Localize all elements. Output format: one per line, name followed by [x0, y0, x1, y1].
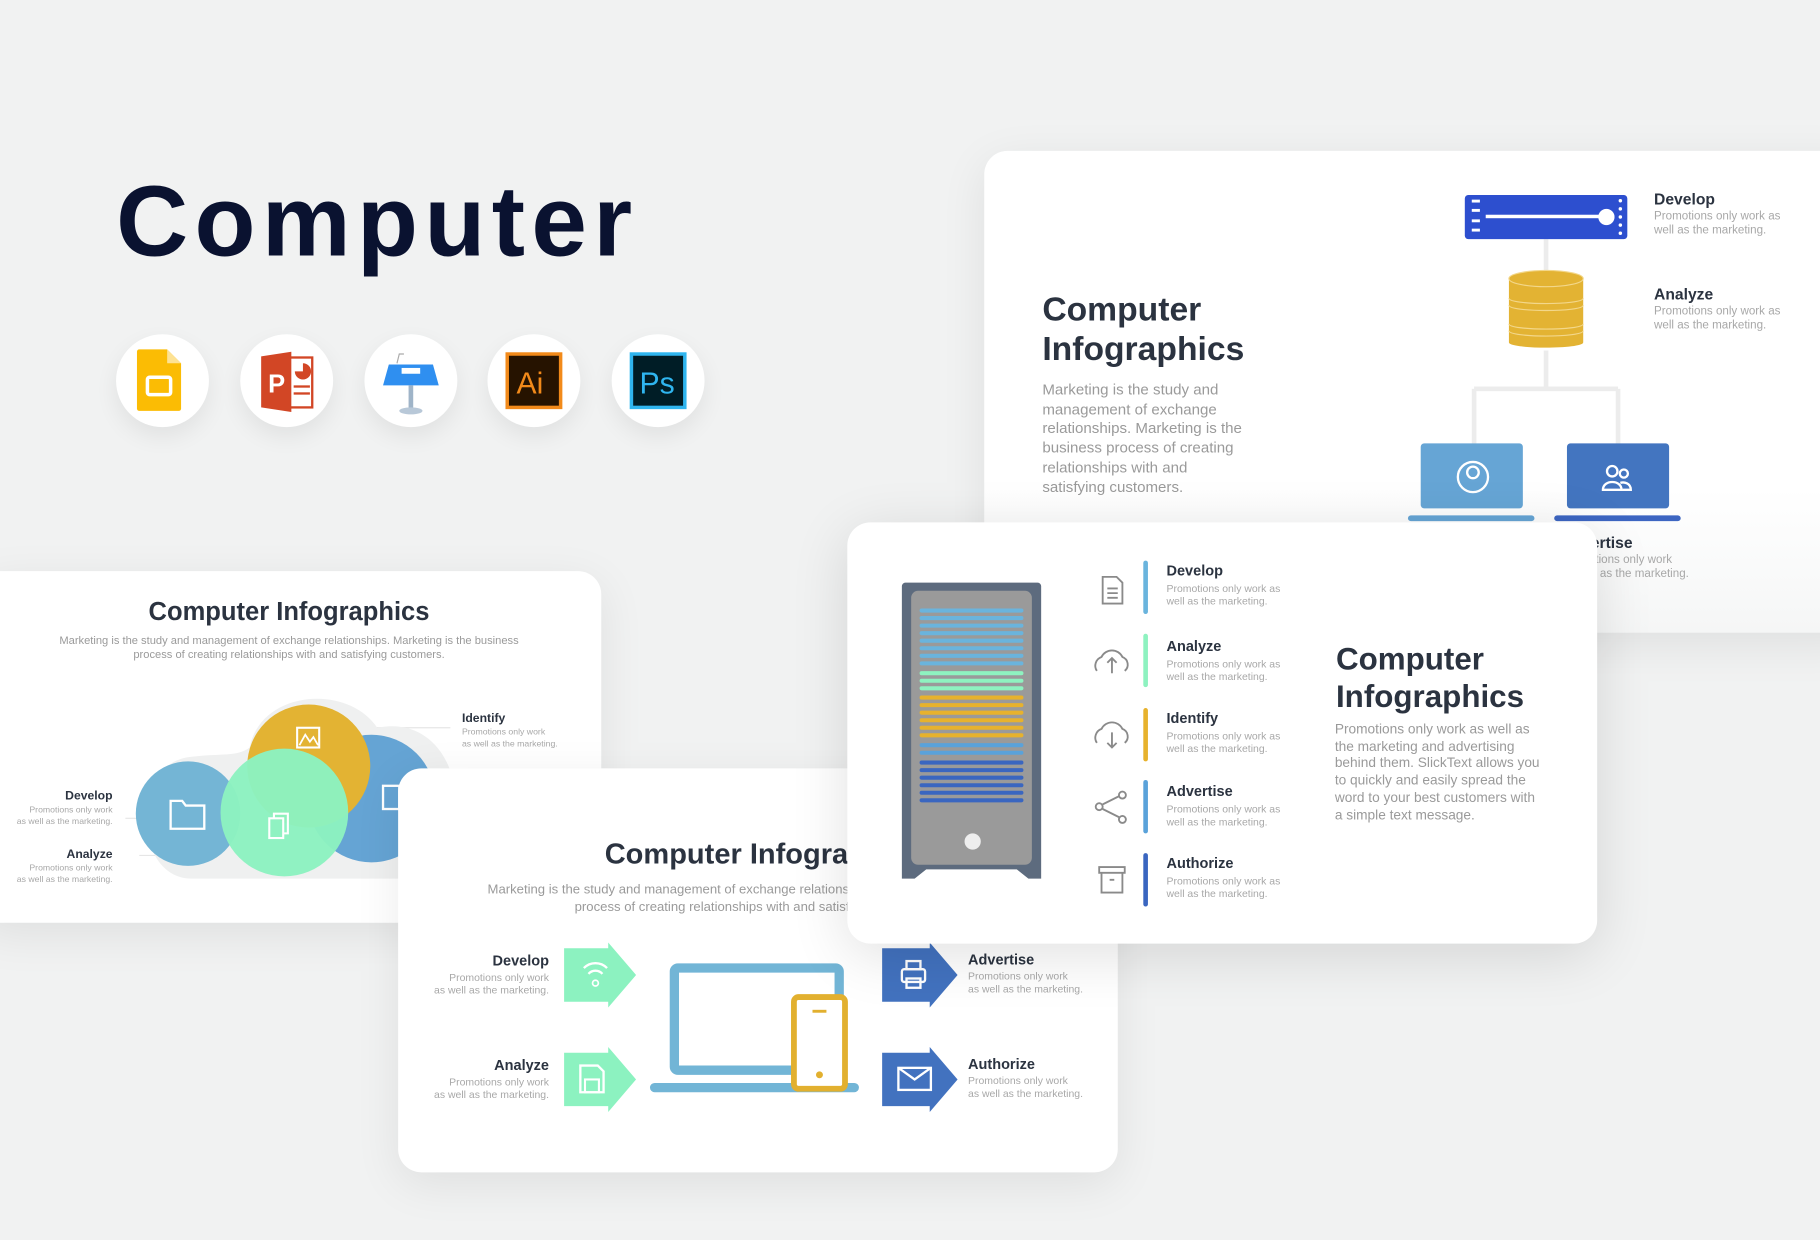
heading — [1336, 642, 1524, 714]
item: identify: Promotions only work as — [1167, 730, 1280, 742]
text block: Promotions only work as well as the marketing and advertising behind them. SlickText allows you to quickly and easily spread the word to your best customers with a simple text message. — [1335, 721, 1540, 822]
chart: venn circles — [126, 699, 450, 878]
item: analyze: Analyze — [1654, 286, 1713, 303]
item: develop: Develop — [1167, 563, 1223, 579]
item: develop: well as the marketing. — [1654, 224, 1766, 237]
icon: powerpoint — [240, 334, 333, 427]
icon: powerpoint: P — [268, 370, 285, 398]
item: advertise: Advertise — [1167, 783, 1233, 800]
panel: card B venn — [0, 571, 601, 923]
item: authorize: as well as the marketing. — [968, 1088, 1083, 1099]
arrow: authorize — [882, 1047, 958, 1112]
item: develop: Develop — [1654, 190, 1715, 208]
item: authorize: Promotions only work as — [1167, 875, 1280, 887]
arrow: analyze — [564, 1047, 636, 1112]
heading — [1042, 291, 1244, 368]
item: analyze: Analyze — [494, 1057, 549, 1074]
item: analyze — [434, 1057, 549, 1100]
item: develop: Promotions only work as — [1654, 210, 1780, 223]
text block: process of creating relationships with and satisfying customers. — [133, 649, 445, 662]
icon: folder — [171, 801, 204, 829]
item: develop — [434, 953, 549, 996]
item: identify: well as the marketing. — [1167, 743, 1268, 754]
item: develop: Promotions only work — [29, 804, 113, 815]
item: analyze: Promotions only work as — [1654, 305, 1780, 318]
heading: Computer Infographics — [149, 597, 429, 626]
item: identify: Identify — [462, 712, 505, 725]
item: authorize: Promotions only work — [968, 1075, 1068, 1086]
text block: process of creating relationships with and satisfying customers. — [575, 900, 941, 914]
icon: photoshop: Ps — [640, 367, 675, 400]
item: identify — [462, 712, 558, 749]
item: develop: well as the marketing. — [1167, 595, 1268, 607]
item: authorize — [968, 1056, 1083, 1099]
item: advertise: Promotions only work as — [1167, 803, 1280, 815]
item: authorize — [1166, 855, 1280, 900]
item: analyze: Promotions only work as — [1167, 658, 1280, 670]
heading: Infographics — [1336, 679, 1524, 714]
icon: server tower — [902, 582, 1042, 879]
icon: illustrator — [487, 334, 580, 427]
icon: database — [1509, 270, 1583, 348]
item: analyze — [17, 847, 113, 884]
icon: group monitor — [1554, 443, 1681, 521]
item: identify: Promotions only work — [462, 727, 545, 737]
item: identify — [1166, 710, 1280, 754]
item: authorize: Authorize — [1167, 855, 1233, 872]
item: develop: Develop — [493, 953, 549, 969]
item: analyze: well as the marketing. — [1654, 319, 1766, 332]
item: identify: Identify — [1167, 710, 1218, 727]
item: advertise: well as the marketing. — [1167, 816, 1268, 828]
title: Computer — [116, 166, 639, 277]
item: analyze — [1166, 638, 1280, 682]
heading: Infographics — [1042, 331, 1244, 368]
item: analyze — [1654, 286, 1780, 332]
item: develop — [1654, 190, 1780, 237]
item: authorize: well as the marketing. — [1167, 888, 1268, 900]
panel: card A network diagram — [984, 151, 1820, 633]
item: advertise: Promotions only work — [968, 970, 1068, 982]
item: develop: Promotions only work as — [1167, 583, 1280, 594]
app icons row — [116, 334, 704, 435]
icon: user monitor — [1408, 443, 1534, 521]
item: advertise: Promotions only work — [1561, 554, 1672, 566]
icons: list — [1094, 576, 1129, 894]
text block: Marketing is the study and management of exchange relationships. Marketing is the business — [59, 635, 519, 648]
icon: image — [297, 728, 319, 747]
item: analyze: as well as the marketing. — [17, 874, 113, 884]
icon: clipboard — [383, 786, 399, 809]
icon: laptop and phone — [650, 968, 859, 1092]
item: advertise: Advertise — [1561, 534, 1633, 551]
icon: keynote — [364, 334, 457, 427]
text block: Marketing is the study and management of exchange relationships. Marketing is the business process of creating relationships with and satisfying customers. — [1042, 381, 1242, 495]
arrow: advertise — [882, 942, 958, 1007]
item: develop: as well as the marketing. — [17, 816, 113, 826]
text block: Marketing is the study and management of exchange relationships. Marketing is the business — [488, 883, 1028, 897]
item: advertise — [1166, 783, 1280, 828]
item: analyze: as well as the marketing. — [434, 1089, 549, 1100]
item: advertise: as well as the marketing. — [968, 983, 1083, 995]
heading: Computer — [1336, 642, 1484, 677]
item: develop — [17, 789, 113, 826]
arrow: develop — [564, 942, 636, 1007]
heading: Computer Infographics — [605, 838, 924, 871]
icon: photoshop — [612, 334, 705, 427]
item: advertise — [968, 952, 1083, 995]
item: analyze: Analyze — [67, 847, 113, 861]
item: develop — [1166, 563, 1280, 607]
item: develop: Promotions only work — [449, 972, 549, 983]
icon: copy — [269, 814, 288, 838]
icon: illustrator: Ai — [517, 367, 543, 400]
text block — [488, 883, 1028, 914]
bars — [1143, 561, 1148, 614]
icon: google slides — [116, 334, 209, 427]
item: analyze: Analyze — [1167, 638, 1221, 655]
item: develop: Develop — [65, 789, 113, 803]
item: advertise: Advertise — [968, 952, 1034, 968]
item: analyze: well as the marketing. — [1167, 671, 1268, 682]
item: develop: as well as the marketing. — [434, 984, 549, 996]
panel: card D devices — [398, 768, 1118, 1172]
item: analyze: Promotions only work — [449, 1076, 549, 1088]
panel: card C server tower — [847, 522, 1597, 944]
heading: Computer — [1042, 291, 1201, 328]
item: identify: as well as the marketing. — [462, 738, 558, 749]
diagram: server network — [1408, 195, 1681, 522]
icon: server — [1465, 195, 1627, 239]
item: advertise: as well as the marketing. — [1561, 568, 1689, 580]
text block — [59, 635, 519, 662]
item: advertise — [1561, 534, 1689, 580]
item: authorize: Authorize — [968, 1056, 1035, 1072]
item: analyze: Promotions only work — [29, 862, 113, 873]
